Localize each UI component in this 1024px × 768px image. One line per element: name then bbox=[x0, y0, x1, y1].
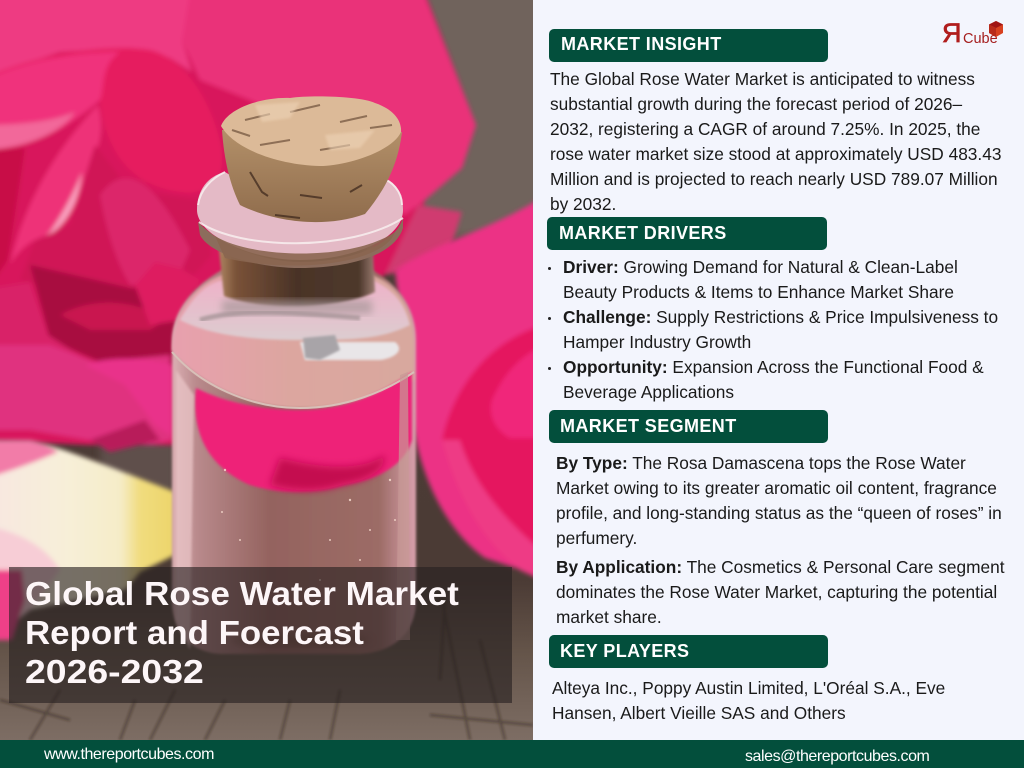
text: market segment bbox=[556, 453, 1004, 627]
text: market segment: profile, and long-standing status as the “queen of roses” in bbox=[556, 503, 1002, 523]
heading: market insight bbox=[549, 29, 828, 62]
logo: RCube: R bbox=[942, 18, 962, 48]
text: market insight: Million and is projected to reach nearly USD 789.07 Million bbox=[550, 169, 998, 189]
title bbox=[25, 575, 459, 690]
text: key players: Hansen, Albert Vieille SAS and Others bbox=[552, 703, 846, 723]
fallen cream petal bbox=[0, 440, 175, 650]
panel: photo of rose water bottle bbox=[0, 0, 533, 740]
list: market drivers bbox=[548, 257, 998, 402]
heading: key players: KEY PLAYERS bbox=[560, 641, 689, 661]
logo: RCube: Cube bbox=[963, 31, 998, 47]
bubbles in liquid bbox=[221, 469, 396, 591]
footer bar bbox=[0, 740, 1024, 768]
roses: right flower bbox=[395, 190, 553, 585]
list: market drivers: Driver: Growing Demand for Natural & Clean-Label bbox=[563, 257, 958, 277]
title band bbox=[9, 567, 512, 703]
footer: website: www.thereportcubes.com bbox=[44, 746, 214, 763]
cork stopper bbox=[222, 130, 402, 222]
icon: glass bottle bbox=[172, 96, 416, 654]
bottle lip ring bbox=[197, 172, 403, 260]
list: market drivers: Hamper Industry Growth bbox=[563, 332, 751, 352]
list: market drivers: Challenge: Supply Restrictions & Price Impulsiveness to bbox=[563, 307, 998, 327]
list: market drivers: Beverage Applications bbox=[563, 382, 734, 402]
text: market segment: market share. bbox=[556, 607, 662, 627]
heading: market drivers: MARKET DRIVERS bbox=[559, 223, 727, 243]
text: market insight: 2032, registering a CAGR of around 7.25%. In 2025, the bbox=[550, 119, 980, 139]
roses: left flower bbox=[0, 0, 476, 452]
text: key players bbox=[552, 678, 945, 723]
heading: market segment: MARKET SEGMENT bbox=[560, 416, 737, 436]
text: market segment: Market owing to its greater aromatic oil content, fragrance bbox=[556, 478, 997, 498]
heading: market drivers bbox=[547, 217, 827, 250]
text: market segment: By Type: The Rosa Damascena tops the Rose Water bbox=[556, 453, 966, 473]
heading: key players bbox=[549, 635, 828, 668]
title: Global Rose Water Market bbox=[25, 575, 459, 612]
panel: right background bbox=[533, 0, 1024, 740]
heading: market insight: MARKET INSIGHT bbox=[561, 34, 722, 54]
text: market segment: dominates the Rose Water Market, capturing the potential bbox=[556, 582, 997, 602]
rose seen through liquid bbox=[195, 372, 412, 492]
text: market segment: By Application: The Cosmetics & Personal Care segment bbox=[556, 557, 1004, 577]
footer: email: sales@thereportcubes.com bbox=[745, 748, 929, 765]
background: wood table and grey backdrop bbox=[0, 0, 553, 760]
text: key players: Alteya Inc., Poppy Austin Limited, L'Oréal S.A., Eve bbox=[552, 678, 945, 698]
logo: RCube bbox=[942, 18, 1003, 48]
text: market insight: by 2032. bbox=[550, 194, 616, 214]
heading: market segment bbox=[549, 410, 828, 443]
list: market drivers: Opportunity: Expansion Across the Functional Food & bbox=[563, 357, 984, 377]
bottle neck with cork inside bbox=[217, 232, 375, 306]
list: market drivers: Beauty Products & Items to Enhance Market Share bbox=[563, 282, 954, 302]
text: market insight: substantial growth during the forecast period of 2026– bbox=[550, 94, 962, 114]
text: market segment: perfumery. bbox=[556, 528, 637, 548]
text: market insight: rose water market size stood at approximately USD 483.43 bbox=[550, 144, 1001, 164]
text: market insight bbox=[550, 69, 1001, 214]
text: market insight: The Global Rose Water Market is anticipated to witness bbox=[550, 69, 975, 89]
title: 2026-2032 bbox=[25, 653, 204, 690]
title: Report and Foercast bbox=[25, 614, 364, 651]
